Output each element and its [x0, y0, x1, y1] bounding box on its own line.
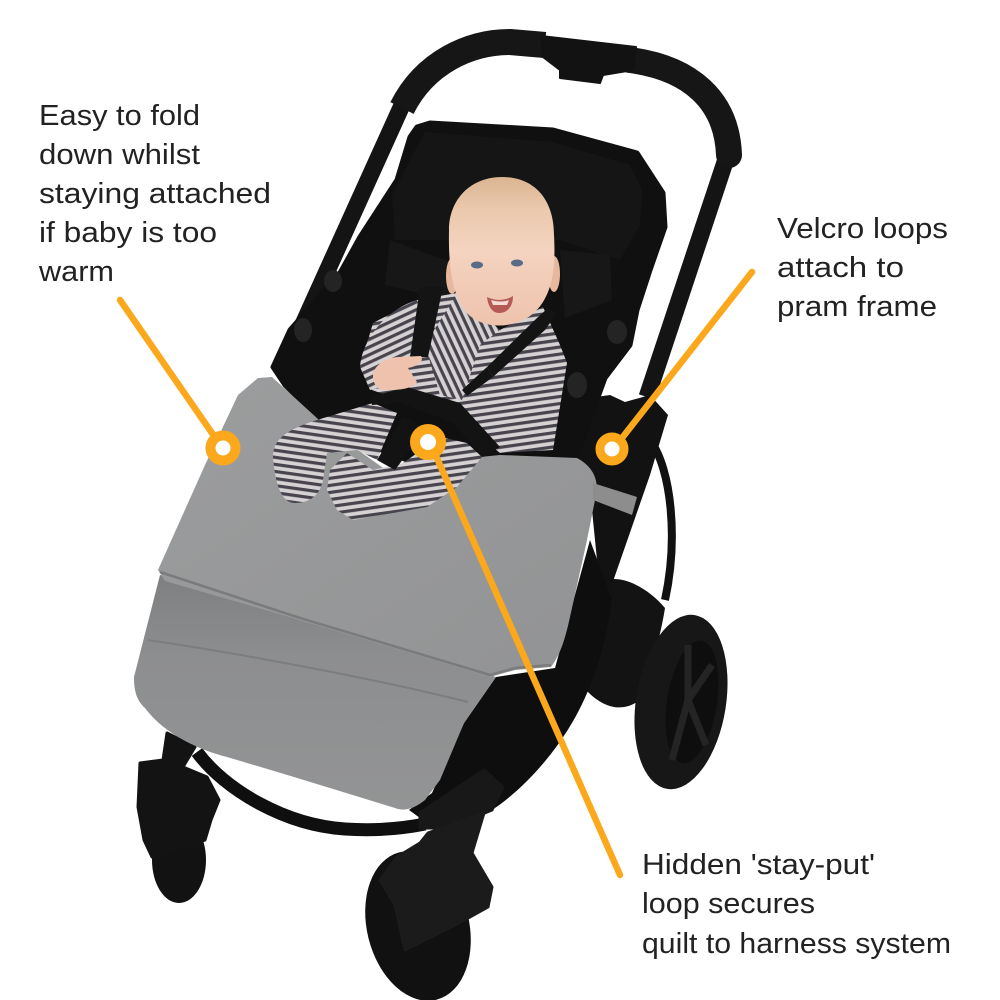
text: easy to fold	[38, 100, 271, 288]
text: velcro loops: attach to	[777, 252, 904, 284]
text: easy to fold: staying attached	[39, 178, 271, 210]
text: easy to fold: down whilst	[39, 139, 200, 171]
text: velcro loops	[777, 213, 948, 323]
bottom bar	[197, 752, 425, 830]
baby head	[446, 258, 458, 294]
callout line: fold down	[120, 300, 236, 460]
callout line: stay-put loop	[415, 429, 620, 875]
baby	[273, 177, 567, 520]
harness straps	[410, 287, 557, 377]
front wheels	[138, 733, 492, 1000]
quilt lower section	[134, 575, 496, 810]
velcro loop	[593, 483, 637, 515]
quilt	[134, 377, 637, 810]
stroller frame and handle	[197, 36, 729, 830]
callout line: velcro loops	[600, 272, 752, 461]
baby legs	[273, 403, 397, 503]
rear wheel	[586, 440, 739, 796]
text: hidden stay-put loop: quilt to harness system	[642, 928, 951, 960]
text: easy to fold: if baby is too	[39, 217, 217, 249]
underside and curved frame	[409, 540, 612, 818]
text: velcro loops: pram frame	[777, 291, 937, 323]
text: velcro loops: Velcro loops	[777, 213, 948, 245]
text: hidden stay-put loop: Hidden 'stay-put'	[642, 849, 875, 881]
baby hand	[373, 356, 422, 390]
text: easy to fold: warm	[38, 256, 114, 288]
frame tube	[555, 395, 668, 590]
seat hubs	[294, 270, 627, 398]
seat back	[273, 123, 665, 465]
text: easy to fold: Easy to fold	[39, 100, 200, 132]
text: hidden stay-put loop: loop secures	[642, 888, 815, 920]
baby torso	[360, 293, 567, 453]
quilt upper flap	[158, 377, 597, 677]
text: hidden stay-put loop	[642, 849, 951, 960]
